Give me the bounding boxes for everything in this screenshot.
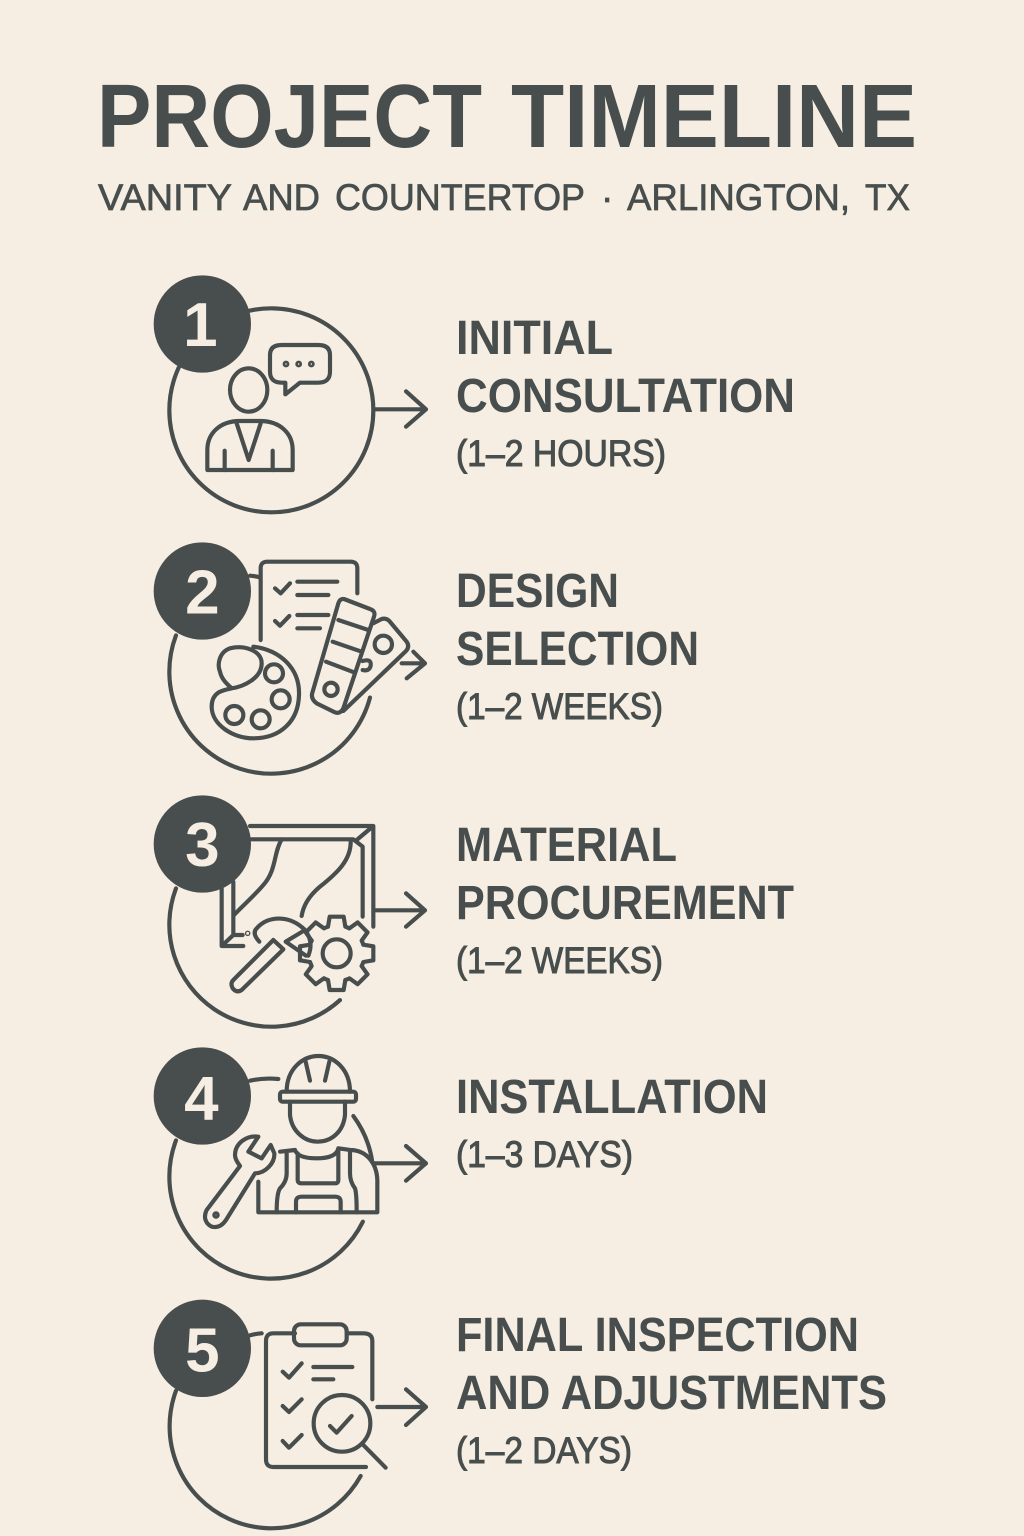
step 5 text: (1–2 DAYS) bbox=[456, 1430, 632, 1471]
title: TIMELINE bbox=[511, 67, 917, 167]
title bbox=[97, 67, 917, 167]
icon: gear bbox=[300, 917, 373, 990]
step 1 text bbox=[456, 312, 795, 474]
step 5 icon bbox=[154, 1300, 426, 1528]
subtitle bbox=[98, 177, 910, 218]
arrow bbox=[377, 1389, 426, 1425]
step 3 text: PROCUREMENT bbox=[456, 877, 794, 930]
subtitle: TX bbox=[865, 177, 910, 218]
step 5 text: FINAL INSPECTION bbox=[456, 1309, 859, 1362]
step 3: material procurement bbox=[154, 795, 794, 1027]
title: PROJECT bbox=[97, 67, 482, 167]
number badge 4 bbox=[154, 1047, 251, 1145]
number badge 2 bbox=[154, 542, 251, 640]
icon: frame with drapes bbox=[222, 826, 373, 946]
step 5 ring bbox=[170, 1333, 361, 1528]
step 3 ring bbox=[169, 888, 340, 1027]
step 4 text: (1–3 DAYS) bbox=[456, 1134, 633, 1175]
step 1 text: CONSULTATION bbox=[456, 370, 795, 423]
step 3 text: MATERIAL bbox=[456, 819, 677, 872]
icon: wrench bbox=[205, 1136, 274, 1227]
step 1 ring bbox=[169, 308, 373, 512]
step 4 ring bbox=[169, 1079, 372, 1279]
subtitle: ARLINGTON, bbox=[627, 177, 850, 218]
icon: clipboard checklist bbox=[266, 1324, 372, 1467]
step 4 text bbox=[456, 1071, 768, 1175]
icon: construction worker bbox=[258, 1056, 377, 1212]
step 4 icon bbox=[154, 1047, 426, 1279]
arrow bbox=[373, 1146, 426, 1181]
subtitle: COUNTERTOP bbox=[335, 177, 585, 218]
icon: person and speech bubble bbox=[207, 345, 330, 470]
step 1 icon bbox=[154, 275, 426, 512]
step 4: installation bbox=[154, 1047, 768, 1279]
step 2 ring bbox=[169, 576, 370, 774]
icon: checklist document bbox=[261, 562, 357, 640]
number badge 4: 4 bbox=[184, 1064, 219, 1133]
arrow bbox=[402, 652, 425, 678]
icon: colour swatches bbox=[312, 599, 408, 713]
arrow bbox=[374, 391, 426, 427]
step 2 text: (1–2 WEEKS) bbox=[456, 686, 663, 727]
number badge 2: 2 bbox=[185, 559, 220, 628]
subtitle: VANITY bbox=[98, 177, 232, 218]
step 2 text: DESIGN bbox=[456, 565, 619, 618]
icon: hammer bbox=[231, 919, 311, 991]
step 5: final inspection bbox=[154, 1300, 887, 1528]
step 1 text: (1–2 HOURS) bbox=[456, 433, 666, 474]
step 1: initial consultation bbox=[154, 275, 795, 512]
arrow bbox=[376, 893, 425, 927]
step 5 text bbox=[456, 1309, 887, 1471]
number badge 5 bbox=[154, 1300, 251, 1397]
step 1 text: INITIAL bbox=[456, 312, 613, 365]
step 2: design selection bbox=[154, 542, 699, 774]
subtitle: · bbox=[601, 177, 613, 218]
number badge 1 bbox=[154, 275, 251, 373]
step 2 icon bbox=[154, 542, 425, 774]
number badge 5: 5 bbox=[185, 1317, 220, 1386]
icon: magnifier bbox=[314, 1395, 386, 1468]
icon: paint palette bbox=[212, 647, 299, 738]
number badge 3 bbox=[154, 795, 251, 893]
step 4 text: INSTALLATION bbox=[456, 1071, 768, 1124]
step 3 text: (1–2 WEEKS) bbox=[456, 940, 663, 981]
subtitle: AND bbox=[243, 177, 320, 218]
step 3 text bbox=[456, 819, 794, 981]
step 2 text: SELECTION bbox=[456, 623, 699, 676]
step 2 text bbox=[456, 565, 699, 727]
step 3 icon bbox=[154, 795, 425, 1027]
number badge 1: 1 bbox=[183, 291, 218, 360]
number badge 3: 3 bbox=[185, 811, 220, 880]
step 5 text: AND ADJUSTMENTS bbox=[456, 1367, 887, 1420]
